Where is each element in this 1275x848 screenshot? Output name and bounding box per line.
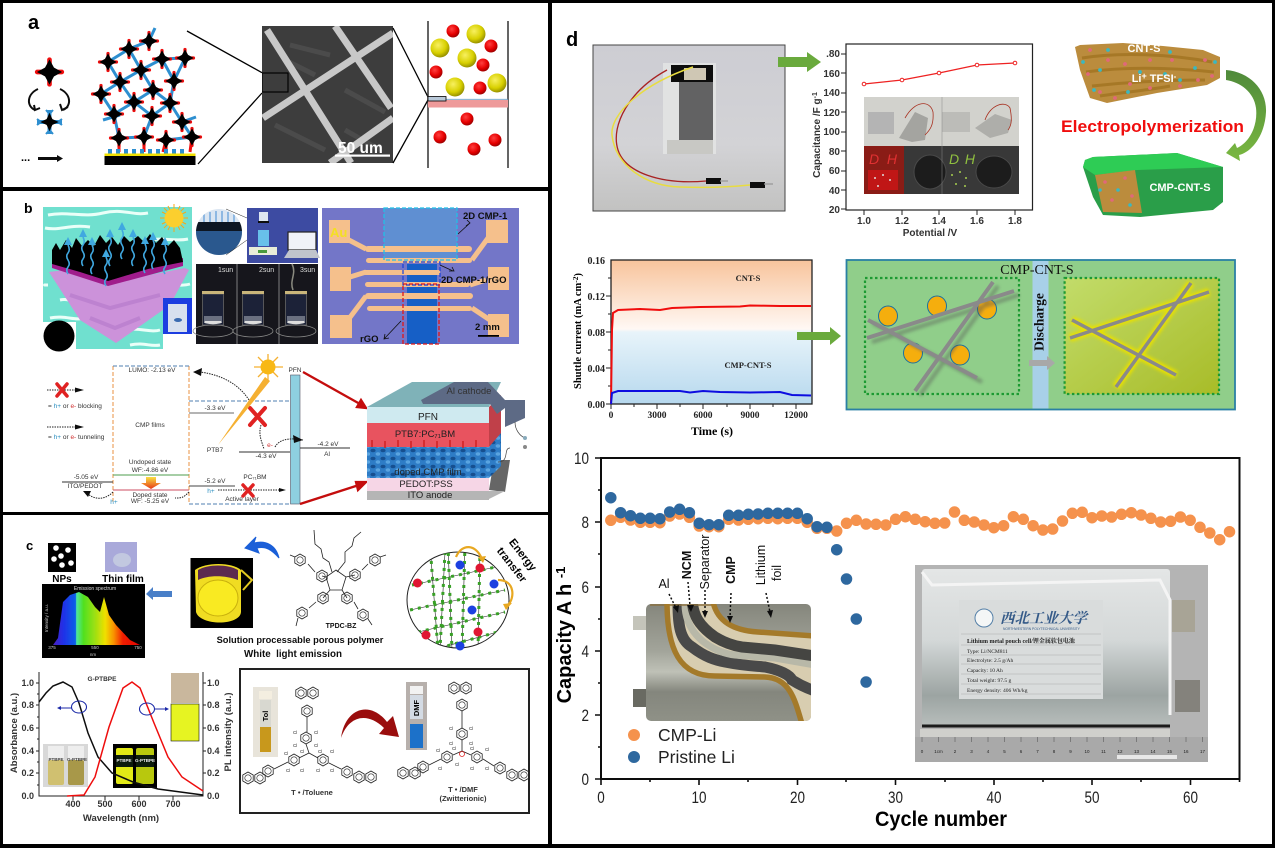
label sheet: 西北工业大学 bbox=[1000, 610, 1090, 627]
chart: capacitance vs potential: Potential /V bbox=[903, 228, 958, 239]
chart: shuttle current: 0.08 bbox=[588, 328, 605, 339]
molecule: T radical in DMF: (Zwitterionic) bbox=[439, 794, 487, 803]
chart: emission spectrum bbox=[42, 584, 145, 658]
micrograph: Au electrode device: 2D CMP-1/rGO bbox=[441, 275, 506, 286]
ruler: 12 bbox=[1117, 749, 1123, 754]
photo: vials under 1, 2 and 3 sun: 1sun bbox=[218, 267, 233, 274]
chart: capacitance vs potential: 40 bbox=[829, 186, 840, 197]
chart: absorbance and PL: 0.4 bbox=[21, 746, 34, 756]
molecule: T radical in DMF: Cl bbox=[485, 766, 489, 771]
polymer network on substrate bbox=[92, 28, 200, 165]
chart: absorbance and PL: 0.6 bbox=[207, 723, 220, 733]
arrow: blue left bbox=[146, 587, 172, 600]
energy level diagram: PTB7 bbox=[207, 447, 224, 454]
vial: Tol bbox=[253, 687, 278, 757]
energy level diagram: e- bbox=[267, 442, 273, 449]
chart: capacity vs cycle number: 60 bbox=[1183, 788, 1198, 807]
ruler: 13 bbox=[1134, 749, 1139, 754]
molecule: T radical in DMF: Cl bbox=[485, 747, 489, 752]
chart: shuttle current: CNT-S bbox=[736, 273, 761, 283]
vial: DMF bbox=[406, 682, 427, 750]
vial: DMF: DMF bbox=[412, 699, 421, 716]
molecule: T radical in toluene: Cl bbox=[314, 730, 318, 735]
label sheet: Lithium metal pouch cell/锂金属软包电池 bbox=[967, 637, 1075, 645]
ruler: 10 bbox=[1084, 749, 1090, 754]
label sheet: Electrolyte: 2.5 g/Ah bbox=[967, 658, 1014, 664]
chart: capacity vs cycle number: 0 bbox=[582, 770, 589, 789]
molecule: T radical in toluene: Cl bbox=[286, 768, 290, 773]
molecule: T radical in DMF: Cl bbox=[469, 726, 473, 731]
molecule: TPDC-BZ bbox=[290, 530, 386, 630]
chart: absorbance and PL: 400 bbox=[65, 799, 81, 809]
molecule: T radical in DMF: Cl bbox=[436, 748, 440, 753]
label sheet: Total weight: 97.5 g bbox=[967, 678, 1011, 684]
chart: absorbance and PL: 0.2 bbox=[207, 768, 220, 778]
photo: vials under 1, 2 and 3 sun: 3sun bbox=[300, 267, 315, 274]
molecule: T radical in toluene: Cl bbox=[284, 751, 288, 756]
chart: shuttle current: 0.12 bbox=[588, 292, 605, 303]
ruler: 15 bbox=[1167, 749, 1172, 754]
chart: shuttle current: 12000 bbox=[784, 411, 808, 421]
icons: red crosses bbox=[57, 384, 265, 496]
illustration: CMP-CNT-S block bbox=[1083, 153, 1223, 217]
energy level diagram: PC₇₁BM bbox=[243, 474, 267, 481]
chart: absorbance and PL: PTBPE bbox=[116, 758, 132, 763]
micrograph: Au electrode device: Au bbox=[330, 225, 347, 240]
diagram: polymer network energy transfer bbox=[407, 545, 512, 650]
molecule: T radical in DMF: T • /DMF bbox=[448, 785, 478, 794]
micrograph: Au electrode device bbox=[322, 208, 519, 345]
chart: capacitance vs potential: 60 bbox=[829, 166, 840, 177]
chart: emission spectrum: Emission spectrum bbox=[74, 586, 116, 592]
molecule: T radical in toluene: Cl bbox=[300, 768, 304, 773]
chart: shuttle current: 0.00 bbox=[588, 400, 605, 411]
chart: absorbance and PL: G-PTBPE bbox=[135, 758, 155, 763]
heading c: c bbox=[26, 538, 33, 553]
chart: capacitance vs potential: 140 bbox=[823, 88, 840, 99]
label sheet: Energy density: 406 Wh/kg bbox=[967, 688, 1028, 694]
chart: absorbance and PL: 1.0 bbox=[21, 678, 34, 688]
arrow: green curved bbox=[1226, 70, 1266, 161]
molecule: TPDC-BZ: TPDC-BZ bbox=[326, 623, 357, 630]
chart: absorbance and PL: 0.6 bbox=[21, 723, 34, 733]
icon: monomer with blue forked tips bbox=[37, 110, 62, 134]
chart: shuttle current: -2 bbox=[571, 276, 580, 283]
caption: white light emission bbox=[217, 635, 384, 660]
energy level diagram: CMP films bbox=[135, 422, 165, 429]
molecule: T radical in DMF: Cl bbox=[449, 741, 453, 746]
chart: capacitance vs potential: .80 bbox=[826, 49, 840, 60]
micrograph: Au electrode device: rGO bbox=[360, 334, 378, 345]
inset: LED photos: D H bbox=[869, 151, 898, 167]
chart: capacitance vs potential: 120 bbox=[823, 108, 840, 119]
chart: absorbance and PL: PL intensity (a.u.) bbox=[223, 692, 234, 772]
icon: sun with beam bbox=[218, 354, 283, 445]
device stack: ITO anode bbox=[408, 490, 452, 501]
labels: NPs and Thin film: NPs bbox=[52, 574, 72, 585]
photo: vials under 1, 2 and 3 sun: 2sun bbox=[259, 267, 274, 274]
swatch: thin film bbox=[105, 542, 137, 572]
chart: capacitance vs potential: -1 bbox=[812, 92, 819, 98]
energy level diagram: -3.3 eV bbox=[205, 405, 226, 412]
molecule: T radical in toluene bbox=[243, 687, 376, 797]
labels: NPs and Thin film bbox=[52, 574, 144, 585]
ruler: 4 bbox=[987, 749, 990, 754]
molecule: T radical in toluene: T • /Toluene bbox=[291, 788, 333, 797]
caption: white light emission: White light emission bbox=[244, 649, 342, 660]
scale bar: 50 um: 50 um bbox=[338, 140, 383, 157]
energy level diagram: -5.2 eV bbox=[205, 478, 226, 485]
ruler: 3 bbox=[970, 749, 973, 754]
energy level diagram: PFN bbox=[288, 367, 302, 374]
zoom lines to SEM bbox=[187, 31, 262, 164]
chart: capacity vs cycle number: 30 bbox=[888, 788, 903, 807]
energy level diagram: ITO/PEDOT bbox=[68, 483, 102, 490]
label: Electropolymerization: Electropolymerization bbox=[1061, 117, 1244, 136]
SEM micrograph of mesh bbox=[262, 26, 393, 163]
device stack: Al cathode bbox=[447, 386, 491, 397]
labels: NPs and Thin film: Thin film bbox=[102, 574, 144, 585]
caption: white light emission: Solution processable porous polymer bbox=[217, 635, 384, 645]
label: energy transfer bbox=[494, 537, 539, 586]
ruler: 6 bbox=[1020, 749, 1023, 754]
chart: absorbance and PL: G-PTBPE bbox=[88, 676, 117, 683]
chart: capacity vs cycle number: -1 bbox=[553, 567, 568, 578]
label: energy transfer: transfer bbox=[494, 545, 529, 586]
chart: absorbance and PL: Absorbance (a.u.) bbox=[9, 693, 20, 773]
chart: shuttle current: 0 bbox=[609, 411, 614, 421]
device stack: PTB7:PC₇₁BM bbox=[395, 429, 455, 440]
molecule: T radical in toluene: Cl bbox=[318, 749, 322, 754]
chart: capacitance vs potential bbox=[812, 44, 1032, 239]
panel d: batteries bbox=[552, 3, 1272, 844]
chart: absorbance and PL: 600 bbox=[131, 799, 147, 809]
illustration: CNT-S block: Li bbox=[1132, 73, 1141, 85]
icon: cycle arrows bbox=[29, 89, 69, 110]
molecule: T radical in toluene: Cl bbox=[330, 749, 334, 754]
ruler: 16 bbox=[1183, 749, 1189, 754]
chart: absorbance and PL: 0.8 bbox=[207, 700, 220, 710]
chart: capacity vs cycle number: 20 bbox=[790, 788, 805, 807]
molecule: T radical in DMF: Cl bbox=[455, 762, 459, 767]
labels: cell layers with arrows: CMP bbox=[724, 556, 738, 584]
ruler: 7 bbox=[1036, 749, 1039, 754]
label: energy transfer: Energy bbox=[506, 537, 539, 574]
chart: shuttle current: 9000 bbox=[740, 411, 760, 421]
panel c: light emission bbox=[3, 515, 548, 844]
chart: capacitance vs potential: Capacitance /F g bbox=[812, 98, 823, 178]
heading d: d bbox=[566, 29, 578, 51]
chart: capacity vs cycle number: 4 bbox=[582, 642, 589, 661]
chart: shuttle current: ) bbox=[573, 272, 584, 276]
chart: shuttle current: 6000 bbox=[694, 411, 713, 421]
label sheet bbox=[959, 600, 1103, 699]
chart: capacitance vs potential: 1.0 bbox=[857, 216, 871, 227]
chart: capacity vs cycle number: 10 bbox=[692, 788, 706, 807]
photo: glowing beaker bbox=[190, 558, 253, 628]
chart: capacitance vs potential: 1.2 bbox=[895, 216, 909, 227]
photo: 10 Ah lithium pouch cell bbox=[915, 565, 1208, 762]
illustration: evaporation setup bbox=[196, 208, 320, 263]
heading b: b bbox=[24, 200, 33, 216]
labels: cell layers with arrows: NCM bbox=[680, 551, 694, 579]
device stack: doped CMP film bbox=[394, 467, 462, 478]
arrow: green to capacitance chart bbox=[778, 52, 821, 72]
molecule: T radical in toluene: Cl bbox=[316, 768, 320, 773]
chart: emission spectrum: 375 bbox=[48, 645, 56, 650]
chart: absorbance and PL: 0.4 bbox=[207, 746, 220, 756]
energy level diagram: WF: -5.25 eV bbox=[131, 498, 170, 505]
inset: LED photos: D H bbox=[949, 151, 976, 167]
molecule: T radical in DMF: Cl bbox=[449, 726, 453, 731]
molecule: T radical in DMF: Cl bbox=[470, 766, 474, 771]
chart: absorbance and PL: 0.0 bbox=[21, 791, 34, 801]
chart: absorbance and PL: 0.8 bbox=[21, 700, 34, 710]
micrograph: Au electrode device: 2D CMP-1 bbox=[463, 211, 508, 222]
photo: vials under 1, 2 and 3 sun bbox=[193, 264, 318, 344]
label sheet: Type: Li/NCM811 bbox=[967, 649, 1008, 655]
ruler: 8 bbox=[1053, 749, 1056, 754]
energy level diagram: -4.2 eV bbox=[318, 441, 339, 448]
inset: LED photos bbox=[864, 97, 1019, 194]
labels: cell layers with arrows: foil bbox=[770, 565, 784, 581]
energy level diagram: -5.05 eV bbox=[74, 474, 99, 481]
schematic: discharge of CMP-CNT-S: CMP-CNT-S bbox=[1000, 263, 1074, 278]
labels: cell layers with arrows bbox=[658, 535, 784, 623]
chart: shuttle current: Time (s) bbox=[691, 424, 733, 438]
chart: capacity vs cycle number bbox=[553, 449, 1240, 831]
device stack bbox=[367, 382, 527, 501]
legend: blocking and tunneling bbox=[48, 403, 105, 441]
molecule: T radical in toluene: Cl bbox=[330, 768, 334, 773]
chart: shuttle current: 0.16 bbox=[588, 256, 605, 267]
molecule: T radical in toluene: Cl bbox=[314, 743, 318, 748]
arrow: green to discharge schematic bbox=[797, 327, 841, 345]
chart: shuttle current: Shuttle current (mA cm bbox=[573, 283, 584, 389]
chart: capacity vs cycle number: 50 bbox=[1084, 788, 1100, 807]
ruler: 1cm bbox=[934, 749, 943, 754]
molecule: T radical in DMF: Cl bbox=[438, 766, 442, 771]
energy level diagram: Undoped state bbox=[129, 459, 172, 466]
chart: absorbance and PL: PTBPE bbox=[48, 757, 64, 762]
chart: capacitance vs potential: 1.8 bbox=[1008, 216, 1022, 227]
energy level diagram: LUMO: -2.13 eV bbox=[129, 367, 176, 374]
legend: Pristine Li bbox=[658, 747, 735, 767]
photo: pouch device with wires bbox=[593, 45, 785, 211]
ruler: 9 bbox=[1069, 749, 1072, 754]
device stack: PFN bbox=[418, 412, 438, 423]
device stack: PEDOT:PSS bbox=[399, 479, 453, 490]
chart: absorbance and PL: 0.0 bbox=[207, 791, 220, 801]
labels: cell layers with arrows: Separator bbox=[698, 535, 712, 589]
box: radical molecules in solvents bbox=[240, 669, 529, 813]
chart: emission spectrum: nm bbox=[90, 652, 96, 657]
legend bbox=[628, 725, 735, 767]
chart: shuttle current: CMP-CNT-S bbox=[725, 360, 772, 370]
molecule: T radical in DMF: Cl bbox=[470, 746, 474, 751]
chart: capacity vs cycle number: 0 bbox=[597, 788, 605, 807]
chart: capacitance vs potential: 1.4 bbox=[932, 216, 946, 227]
panel b: films and devices bbox=[3, 191, 548, 512]
chart: capacity vs cycle number: 2 bbox=[582, 706, 589, 725]
heading a: a bbox=[28, 12, 40, 34]
chart: emission spectrum: 750 bbox=[134, 645, 142, 650]
chart: capacitance vs potential: 80 bbox=[829, 147, 840, 158]
label sheet: Capacity: 10 Ah bbox=[967, 668, 1003, 674]
chart: emission spectrum: 550 bbox=[91, 645, 99, 650]
chart: shuttle current: 3000 bbox=[648, 411, 667, 421]
ruler: 2 bbox=[954, 749, 957, 754]
illustration: solar evaporation film bbox=[43, 204, 192, 352]
molecule: T radical in toluene: Cl bbox=[300, 749, 304, 754]
icon: monomer with red tips bbox=[37, 60, 62, 84]
chart: absorbance and PL: Wavelength (nm) bbox=[83, 813, 159, 824]
chart: absorbance and PL: 700 bbox=[165, 799, 181, 809]
inset: pouch cell layers bbox=[633, 602, 815, 724]
chart: capacity vs cycle number: 10 bbox=[574, 449, 589, 468]
chart: capacity vs cycle number: Cycle number bbox=[875, 808, 1007, 831]
ruler: 11 bbox=[1101, 749, 1106, 754]
illustration: CNT-S block: - bbox=[1174, 72, 1177, 81]
illustration: CNT-S block: TFSI bbox=[1147, 73, 1174, 85]
chart: capacity vs cycle number: 6 bbox=[582, 578, 589, 597]
ruler: 0 bbox=[921, 749, 924, 754]
illustration: CNT-S block: + bbox=[1141, 71, 1147, 81]
energy level diagram: WF:-4.86 eV bbox=[132, 467, 169, 474]
panel a: CMP membrane bbox=[3, 3, 548, 187]
labels: cell layers with arrows: Lithium bbox=[754, 545, 768, 585]
data series: Pristine Li bbox=[611, 498, 866, 682]
micrograph: Au electrode device: 2 mm bbox=[475, 322, 500, 333]
energy level diagram bbox=[47, 366, 350, 506]
arrow: dark red curved bbox=[341, 709, 399, 738]
ruler: 5 bbox=[1003, 749, 1006, 754]
chart: capacitance vs potential: 1.6 bbox=[970, 216, 984, 227]
chart: absorbance and PL bbox=[9, 672, 234, 824]
chart: capacitance vs potential: 100 bbox=[823, 127, 840, 138]
chart: capacity vs cycle number: 40 bbox=[986, 788, 1002, 807]
energy level diagram: Al bbox=[324, 451, 330, 458]
chart: capacitance vs potential: 20 bbox=[829, 205, 840, 216]
ruler: 17 bbox=[1200, 749, 1205, 754]
molecule: T radical in DMF: Cl bbox=[452, 746, 456, 751]
schematic: discharge of CMP-CNT-S: Discharge bbox=[1032, 293, 1046, 351]
chart: absorbance and PL: 1.0 bbox=[207, 678, 220, 688]
chart: emission spectrum: Intensity / a.u. bbox=[44, 604, 49, 632]
legend: blocking and tunneling: = h+ or e- blocking bbox=[48, 403, 102, 410]
illustration: CMP-CNT-S block: CMP-CNT-S bbox=[1149, 182, 1211, 194]
labels: cell layers with arrows: Al bbox=[658, 577, 670, 591]
icon: growth arrow: ... bbox=[21, 152, 30, 164]
arrow: blue curved bbox=[245, 537, 279, 558]
schematic: discharge of CMP-CNT-S bbox=[846, 260, 1235, 410]
chart: capacitance vs potential: 160 bbox=[823, 69, 840, 80]
energy level diagram: h+ bbox=[207, 488, 215, 495]
molecule: T radical in toluene: Cl bbox=[293, 730, 297, 735]
membrane selectivity diagram bbox=[428, 21, 508, 168]
legend: CMP-Li bbox=[658, 725, 716, 745]
illustration: CNT-S block bbox=[1075, 43, 1220, 103]
data series: CMP-Li bbox=[611, 512, 1230, 540]
chart: capacity vs cycle number: Capacity A h bbox=[554, 584, 576, 703]
chart: capacity vs cycle number: 8 bbox=[582, 513, 589, 532]
ruler bbox=[915, 737, 1208, 762]
energy level diagram: h+ bbox=[110, 499, 118, 506]
ruler: 14 bbox=[1150, 749, 1156, 754]
energy level diagram: Doped state bbox=[132, 492, 168, 499]
molecule: T radical in DMF bbox=[398, 682, 529, 803]
energy level diagram: -4.3 eV bbox=[256, 453, 277, 460]
zoom lines to membrane bbox=[393, 28, 428, 163]
chart: shuttle current: 0.04 bbox=[588, 364, 605, 375]
vial: Tol: Tol bbox=[261, 711, 270, 721]
label sheet: NORTHWESTERN POLYTECHNICAL UNIVERSITY bbox=[1003, 627, 1081, 631]
chart: absorbance and PL: 0.2 bbox=[21, 768, 34, 778]
icon: NPs square bbox=[48, 543, 76, 572]
legend: blocking and tunneling: = h+ or e- tunneling bbox=[48, 434, 105, 441]
arrows to device stack bbox=[300, 372, 366, 504]
molecule: T radical in toluene: Cl bbox=[293, 743, 297, 748]
molecule: T radical in DMF: Cl bbox=[469, 741, 473, 746]
energy level diagram: Active layer bbox=[225, 496, 260, 503]
chart: shuttle current bbox=[571, 256, 812, 438]
chart: absorbance and PL: 500 bbox=[97, 799, 113, 809]
illustration: CNT-S block: CNT-S bbox=[1128, 43, 1160, 55]
icon: growth arrow bbox=[21, 152, 63, 164]
chart: absorbance and PL: G-PTBPE bbox=[67, 757, 87, 762]
